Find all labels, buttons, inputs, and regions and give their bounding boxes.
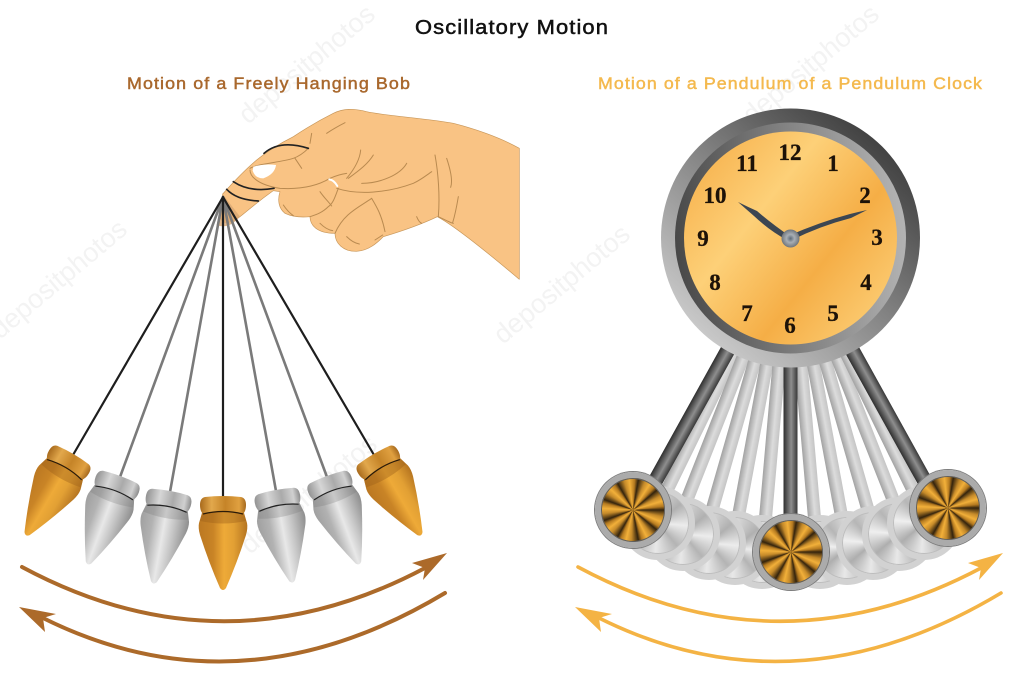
clock numerals: 5 xyxy=(827,301,839,326)
bob: silver 3 xyxy=(252,486,316,587)
clock numerals: 11 xyxy=(736,151,758,176)
pendulum strings xyxy=(73,197,374,497)
clock numerals: 8 xyxy=(709,270,721,295)
pendulum bob: left extreme xyxy=(595,472,671,548)
bob: silver 2 xyxy=(130,487,194,588)
clock numerals: 12 xyxy=(778,140,802,165)
arrow: right panel rightward xyxy=(578,553,1003,621)
clock numerals: 10 xyxy=(704,183,726,208)
watermark xyxy=(0,0,885,560)
clock numerals: 4 xyxy=(860,270,872,295)
watermark: depositphotos xyxy=(235,429,383,560)
arrow: left panel leftward xyxy=(19,593,445,661)
heading: pendulum clock: Motion of a Pendulum of a Pendulum Clock xyxy=(598,75,983,93)
clock numerals: 6 xyxy=(784,313,796,338)
bob: centre xyxy=(199,496,247,590)
arrow: left panel rightward xyxy=(22,553,447,621)
clock hub xyxy=(782,230,800,248)
bob: silver 4 xyxy=(304,468,382,573)
pendulum rods xyxy=(645,234,935,528)
clock numerals: 1 xyxy=(827,151,839,176)
icon: hand holding string xyxy=(217,109,519,279)
clock numerals: 3 xyxy=(871,225,883,250)
pendulum bob: centre xyxy=(753,514,829,590)
clock numerals: 7 xyxy=(741,301,753,326)
heading: freely hanging bob: Motion of a Freely Hanging Bob xyxy=(127,75,411,93)
clock numerals xyxy=(697,140,883,338)
clock outer ring xyxy=(661,108,920,368)
clock numerals: 2 xyxy=(859,183,871,208)
clock xyxy=(661,108,920,368)
arrow: right panel leftward xyxy=(575,593,1001,661)
watermark: depositphotos xyxy=(233,0,381,130)
clock dial xyxy=(684,132,897,344)
watermark: depositphotos xyxy=(737,0,885,130)
clock inner ring xyxy=(675,122,906,354)
bob: right extreme xyxy=(352,442,442,548)
clock hands xyxy=(738,202,867,240)
pendulum bob: right extreme xyxy=(910,470,986,546)
bob: left extreme xyxy=(5,442,95,548)
bob: silver 1 xyxy=(65,468,143,573)
watermark: depositphotos xyxy=(488,219,636,350)
title: Oscillatory Motion xyxy=(415,17,609,39)
clock numerals: 9 xyxy=(697,226,709,251)
